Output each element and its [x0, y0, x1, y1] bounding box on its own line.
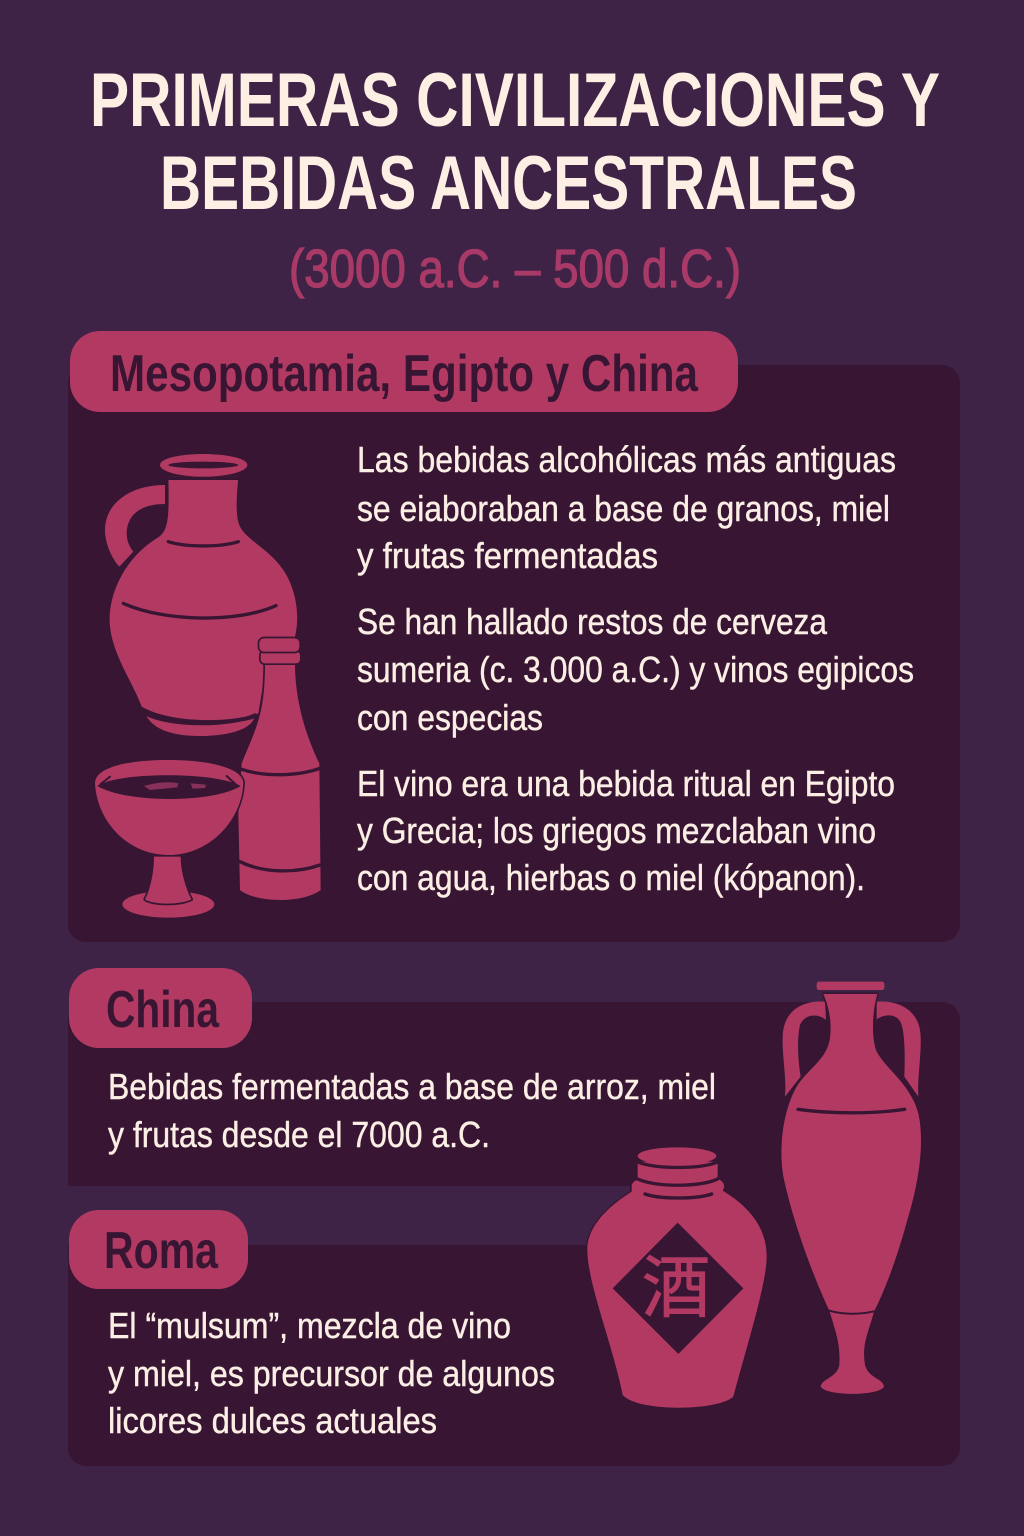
text block: oldest drinks: se eiaboraban a base de granos, miel: [357, 488, 890, 529]
panel: Mesopotamia, Egipto y China: [68, 331, 960, 942]
icon: goblet: [95, 760, 243, 918]
text block: Roma: y miel, es precursor de algunos: [108, 1353, 555, 1394]
heading pill: Roma: Roma: [104, 1222, 219, 1280]
text block: oldest drinks: y frutas fermentadas: [357, 535, 658, 576]
text block: Roma: licores dulces actuales: [108, 1400, 437, 1441]
text block: Roma: [108, 1305, 555, 1441]
text block: archaeological remains: [357, 601, 914, 738]
text block: ritual wine: El vino era una bebida ritual en Egipto: [357, 763, 895, 804]
text block: China: [108, 1066, 716, 1155]
text block: ritual wine: con agua, hierbas o miel (kópanon).: [357, 857, 865, 898]
icon: Chinese liquor jar: [587, 1147, 767, 1408]
panel: China and Roma background: [60, 1002, 960, 1466]
text block: oldest drinks: Las bebidas alcohólicas más antiguas: [357, 439, 896, 480]
heading pill: Mesopotamia, Egipto y China: Mesopotamia, Egipto y China: [110, 345, 699, 403]
text block: ritual wine: y Grecia; los griegos mezclaban vino: [357, 810, 876, 851]
icon: jug, bottle and goblet: [95, 454, 321, 918]
text block: China: Bebidas fermentadas a base de arroz, miel: [108, 1066, 716, 1107]
icon: diamond label: [613, 1223, 743, 1354]
heading pill: Mesopotamia, Egipto y China: [70, 331, 738, 412]
text block: archaeological remains: con especias: [357, 697, 543, 738]
title: [90, 58, 940, 226]
heading pill: China: [69, 968, 252, 1048]
text block: archaeological remains: sumeria (c. 3.000 a.C.) y vinos egipicos: [357, 649, 914, 690]
icon: jug: [105, 454, 297, 736]
heading pill: China: China: [106, 981, 220, 1039]
icon: amphora: [781, 982, 921, 1394]
text block: China: y frutas desde el 7000 a.C.: [108, 1114, 490, 1155]
icon: bottle: [238, 638, 321, 900]
text block: archaeological remains: Se han hallado restos de cerveza: [357, 601, 828, 642]
heading pill: Roma: [69, 1210, 248, 1289]
text block: oldest drinks: [357, 439, 896, 576]
text block: ritual wine: [357, 763, 895, 898]
text block: Roma: El “mulsum”, mezcla de vino: [108, 1305, 511, 1346]
character label: 酒: [642, 1232, 710, 1331]
subtitle: date range: (3000 a.C. – 500 d.C.): [289, 239, 741, 299]
